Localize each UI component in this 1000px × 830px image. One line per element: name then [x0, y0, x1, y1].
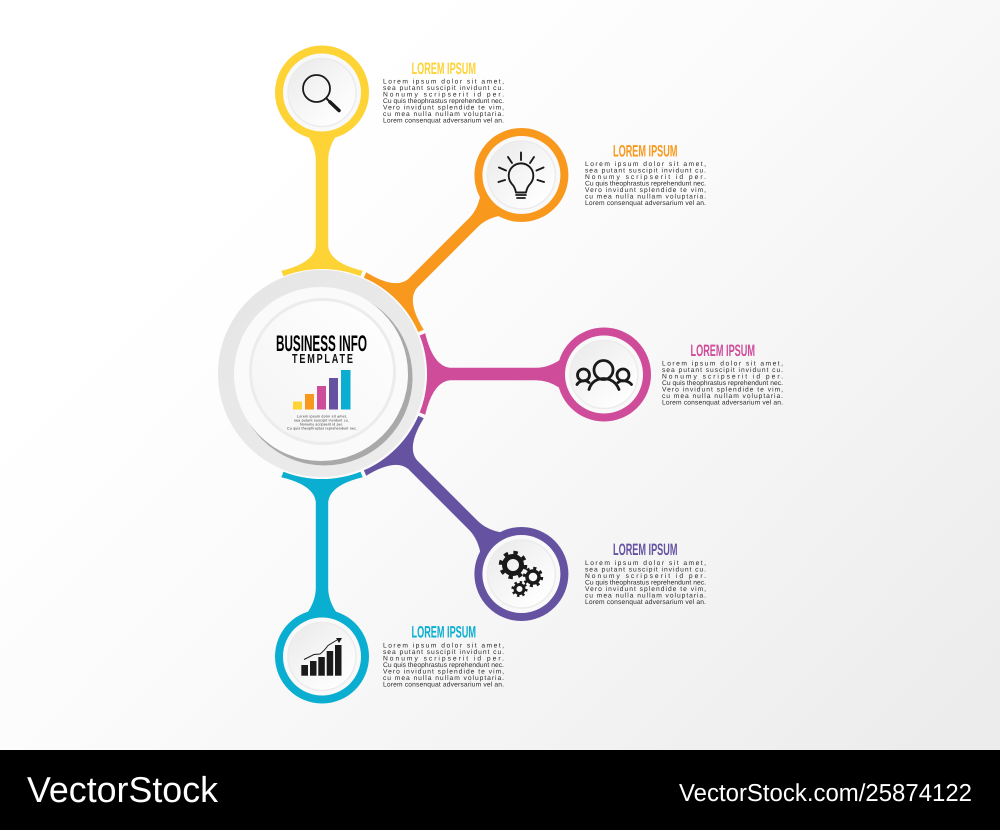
- hub caption: Cu quis theophrastus reprehendunt nec.: [287, 426, 357, 430]
- body: yellow: Nonumy scripserit id per.: [383, 92, 504, 99]
- body: orange: sea putant suscipit invidunt cu.: [585, 168, 706, 174]
- icon: light bulb: [498, 152, 544, 198]
- connector: orange: [362, 174, 522, 334]
- body: teal: [383, 642, 504, 688]
- body: teal: sea putant suscipit invidunt cu.: [383, 649, 504, 656]
- heading: purple: LOREM IPSUM: [613, 541, 678, 559]
- connector: pink: [420, 333, 564, 415]
- heading: orange: LOREM IPSUM: [613, 142, 678, 160]
- body: orange: Cu quis theophrastus reprehendunt nec.: [585, 180, 706, 188]
- text block: purple: [585, 541, 706, 606]
- body: teal: Lorem consenquat adversarium vel an.: [383, 682, 504, 688]
- body: pink: [662, 360, 783, 406]
- text block: pink: [662, 342, 783, 406]
- body: teal: Cu quis theophrastus reprehendunt nec.: [383, 662, 504, 669]
- body: yellow: Cu quis theophrastus reprehendunt nec.: [383, 98, 504, 105]
- node: idea: [474, 128, 568, 222]
- body: pink: cu mea nulla nullam voluptaria.: [662, 393, 783, 400]
- footer url text: VectorStock.com/25874122: [679, 780, 972, 807]
- body: purple: Lorem consenquat adversarium vel an.: [585, 599, 706, 606]
- body: purple: sea putant suscipit invidunt cu.: [585, 566, 706, 574]
- body: purple: [585, 560, 706, 606]
- body: purple: cu mea nulla nullam voluptaria.: [585, 592, 706, 600]
- hub caption: sea putant suscipit invidunt cu.: [294, 418, 349, 422]
- footer bar: [0, 750, 1000, 830]
- hub bar chart: [293, 370, 350, 410]
- body: purple: Lorem ipsum dolor sit amet,: [585, 560, 706, 567]
- body: yellow: cu mea nulla nullam voluptaria.: [383, 111, 504, 118]
- text block: teal: [383, 624, 504, 688]
- body: purple: Vero invidunt splendide te vim,: [585, 586, 706, 593]
- heading: pink: LOREM IPSUM: [690, 342, 755, 360]
- body: orange: cu mea nulla nullam voluptaria.: [585, 194, 706, 200]
- body: yellow: sea putant suscipit invidunt cu.: [383, 85, 504, 92]
- node: settings: [474, 527, 568, 621]
- footer logo text: VectorStock: [27, 769, 219, 810]
- body: purple: Cu quis theophrastus reprehendunt nec.: [585, 580, 706, 586]
- text block: orange: [585, 142, 706, 207]
- body: teal: Lorem ipsum dolor sit amet,: [383, 642, 504, 650]
- body: pink: sea putant suscipit invidunt cu.: [662, 367, 783, 374]
- body: yellow: Lorem consenquat adversarium vel an.: [383, 118, 504, 125]
- body: orange: Nonumy scripserit id per.: [585, 174, 706, 181]
- heading: teal: LOREM IPSUM: [412, 624, 476, 642]
- body: yellow: [383, 79, 504, 125]
- body: yellow: Lorem ipsum dolor sit amet,: [383, 79, 504, 86]
- icon: magnifying glass: [303, 75, 339, 110]
- central hub: [218, 270, 425, 477]
- icon: people: [577, 360, 632, 390]
- body: purple: Nonumy scripserit id per.: [585, 573, 706, 580]
- node: search: [275, 46, 369, 140]
- icon: rising bar chart: [301, 638, 342, 676]
- body: pink: Cu quis theophrastus reprehendunt nec.: [662, 380, 783, 387]
- hub subtitle: TEMPLATE: [292, 351, 353, 366]
- body: teal: Vero invidunt splendide te vim,: [383, 668, 504, 676]
- body: pink: Vero invidunt splendide te vim,: [662, 386, 783, 394]
- body: pink: Lorem ipsum dolor sit amet,: [662, 360, 783, 368]
- body: orange: Lorem ipsum dolor sit amet,: [585, 161, 706, 168]
- body: pink: Lorem consenquat adversarium vel an.: [662, 400, 783, 406]
- body: teal: Nonumy scripserit id per.: [383, 656, 504, 662]
- body: orange: [585, 161, 706, 207]
- body: orange: Vero invidunt splendide te vim,: [585, 187, 706, 194]
- connector: teal: [281, 472, 363, 616]
- node: team: [557, 328, 651, 422]
- connector: yellow: [281, 132, 363, 276]
- node: growth: [275, 610, 369, 704]
- body: teal: cu mea nulla nullam voluptaria.: [383, 675, 504, 682]
- text block: yellow: [383, 60, 504, 125]
- hub caption: Lorem ipsum dolor sit amet,: [297, 414, 347, 418]
- hub title: BUSINESS INFO: [276, 331, 367, 356]
- connector: purple: [362, 414, 522, 574]
- body: pink: Nonumy scripserit id per.: [662, 374, 783, 380]
- icon: gears: [500, 552, 542, 596]
- heading: yellow: LOREM IPSUM: [412, 60, 476, 78]
- body: yellow: Vero invidunt splendide te vim,: [383, 105, 504, 112]
- hub caption: [287, 414, 357, 430]
- body: orange: Lorem consenquat adversarium vel an.: [585, 200, 706, 207]
- hub caption: Nonumy scripserit id per.: [300, 422, 343, 426]
